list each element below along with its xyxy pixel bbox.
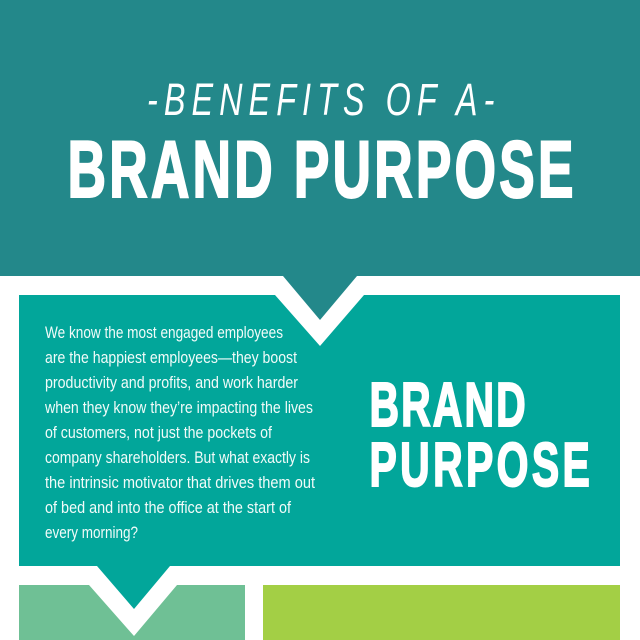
text block: introduction: of bed and into the office at the start of: [45, 498, 291, 517]
text block: introduction: the intrinsic motivator that drives them out: [45, 473, 315, 492]
heading: brand purpose: PURPOSE: [370, 431, 593, 500]
text block: introduction: are the happiest employees—they boost: [45, 348, 297, 367]
text block: introduction: company shareholders. But what exactly is: [45, 448, 310, 467]
text block: introduction: productivity and profits, and work harder: [45, 373, 298, 392]
text block: introduction: when they know they’re impacting the lives: [44, 398, 313, 417]
heading: brand purpose: BRAND: [370, 371, 528, 440]
text block: introduction: We know the most engaged employees: [45, 323, 283, 342]
text block: introduction: every morning?: [45, 523, 138, 542]
title: benefits of a: -BENEFITS OF A-: [147, 76, 500, 125]
heading: brand purpose: [370, 371, 593, 500]
panel: teal introduction with notch and pointer: [19, 295, 620, 609]
header band with pointer: [0, 0, 640, 320]
text block: introduction: [44, 323, 315, 542]
panel: lime green block: [263, 585, 620, 640]
panel: light green block with notch: [19, 585, 245, 640]
title: brand purpose: BRAND PURPOSE: [68, 124, 577, 215]
text block: introduction: of customers, not just the pockets of: [45, 423, 272, 442]
